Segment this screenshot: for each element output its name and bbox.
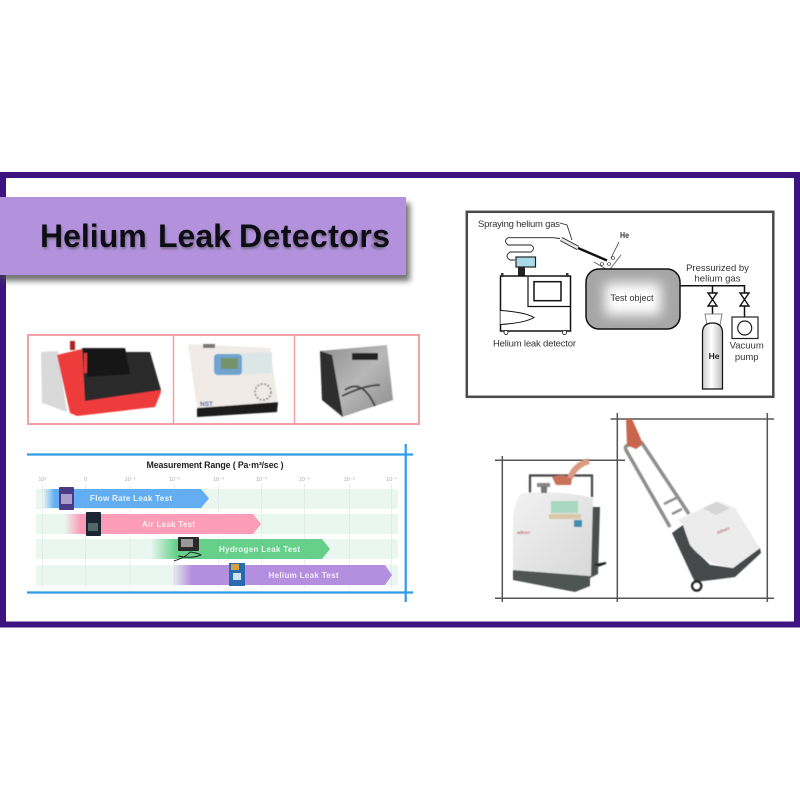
title banner: Helium xyxy=(41,220,148,256)
helium cylinder xyxy=(702,314,722,389)
icon: hydrogen leak tester xyxy=(174,537,201,561)
title banner: Detectors xyxy=(240,220,388,256)
axis labels xyxy=(38,476,397,483)
axis labels: 10⁻² xyxy=(169,477,180,483)
title banner xyxy=(0,197,410,281)
slide frame xyxy=(3,175,797,624)
chart title: Measurement Range ( Pa·m³/sec ) xyxy=(146,460,284,470)
title: Detectors xyxy=(239,218,390,254)
range arrow: air: Air Leak Test xyxy=(142,520,195,529)
photo: detector pulled as trolley: adixen xyxy=(716,526,731,535)
photo: detector pulled as trolley xyxy=(626,419,761,590)
range arrow: hydrogen: Hydrogen Leak Test xyxy=(219,545,300,554)
axis labels: 10⁻¹ xyxy=(125,477,136,483)
label: He gas: He xyxy=(620,230,629,240)
product: red and black detector xyxy=(41,341,161,416)
label: vacuum pump xyxy=(730,340,764,363)
gas piping and valves xyxy=(680,286,749,325)
range arrow: flow rate xyxy=(43,489,209,508)
axis labels: 10¹ xyxy=(38,477,46,483)
axis labels: 10⁻³ xyxy=(213,477,224,483)
range arrow: hydrogen xyxy=(151,539,330,559)
icon: air leak tester xyxy=(86,512,101,536)
test object: Test object xyxy=(610,293,654,303)
photo: detector carried by handle: adixen xyxy=(517,530,531,535)
axis labels: 10⁻⁷ xyxy=(386,476,397,483)
spray hose and gun xyxy=(506,223,621,273)
range arrow: air xyxy=(65,514,261,534)
title banner: Leak xyxy=(159,220,232,256)
label: pressurized by helium gas xyxy=(686,263,749,284)
label: spraying helium gas: Spraying helium gas xyxy=(478,219,560,230)
test object xyxy=(586,269,680,329)
label: pressurized by helium gas: Pressurized by xyxy=(686,263,749,274)
axis labels: 0 xyxy=(84,477,87,483)
range arrow: flow rate: Flow Rate Leak Test xyxy=(90,494,172,503)
axis labels: 10⁻⁵ xyxy=(299,476,310,483)
range arrow: helium: Helium Leak Test xyxy=(268,571,339,580)
label: vacuum pump: pump xyxy=(735,352,759,363)
panel: detector product photos xyxy=(28,335,419,424)
range arrow: helium xyxy=(172,565,392,585)
product: white NST detector xyxy=(188,344,278,417)
axis labels: 10⁻⁴ xyxy=(256,476,268,483)
helium cylinder: He xyxy=(709,351,720,361)
label: pressurized by helium gas: helium gas xyxy=(695,274,741,284)
label: vacuum pump: Vacuum xyxy=(730,340,764,352)
axis labels: 10⁻⁶ xyxy=(344,476,355,483)
icon: helium leak tester xyxy=(229,563,245,586)
vacuum pump xyxy=(732,317,758,338)
icon: flow rate tester xyxy=(59,487,74,510)
label: helium leak detector: Helium leak detector xyxy=(493,338,576,350)
panel: leak test schematic xyxy=(467,212,773,397)
photo: detector carried by handle xyxy=(513,461,606,592)
product: grey detector xyxy=(320,345,393,417)
helium leak detector unit xyxy=(500,257,570,334)
title: Leak xyxy=(158,218,231,254)
title: Helium xyxy=(40,218,147,254)
panel: portable detector photos xyxy=(495,413,774,602)
panel: measurement range chart xyxy=(27,444,413,602)
product: white NST detector: NST xyxy=(200,401,213,408)
